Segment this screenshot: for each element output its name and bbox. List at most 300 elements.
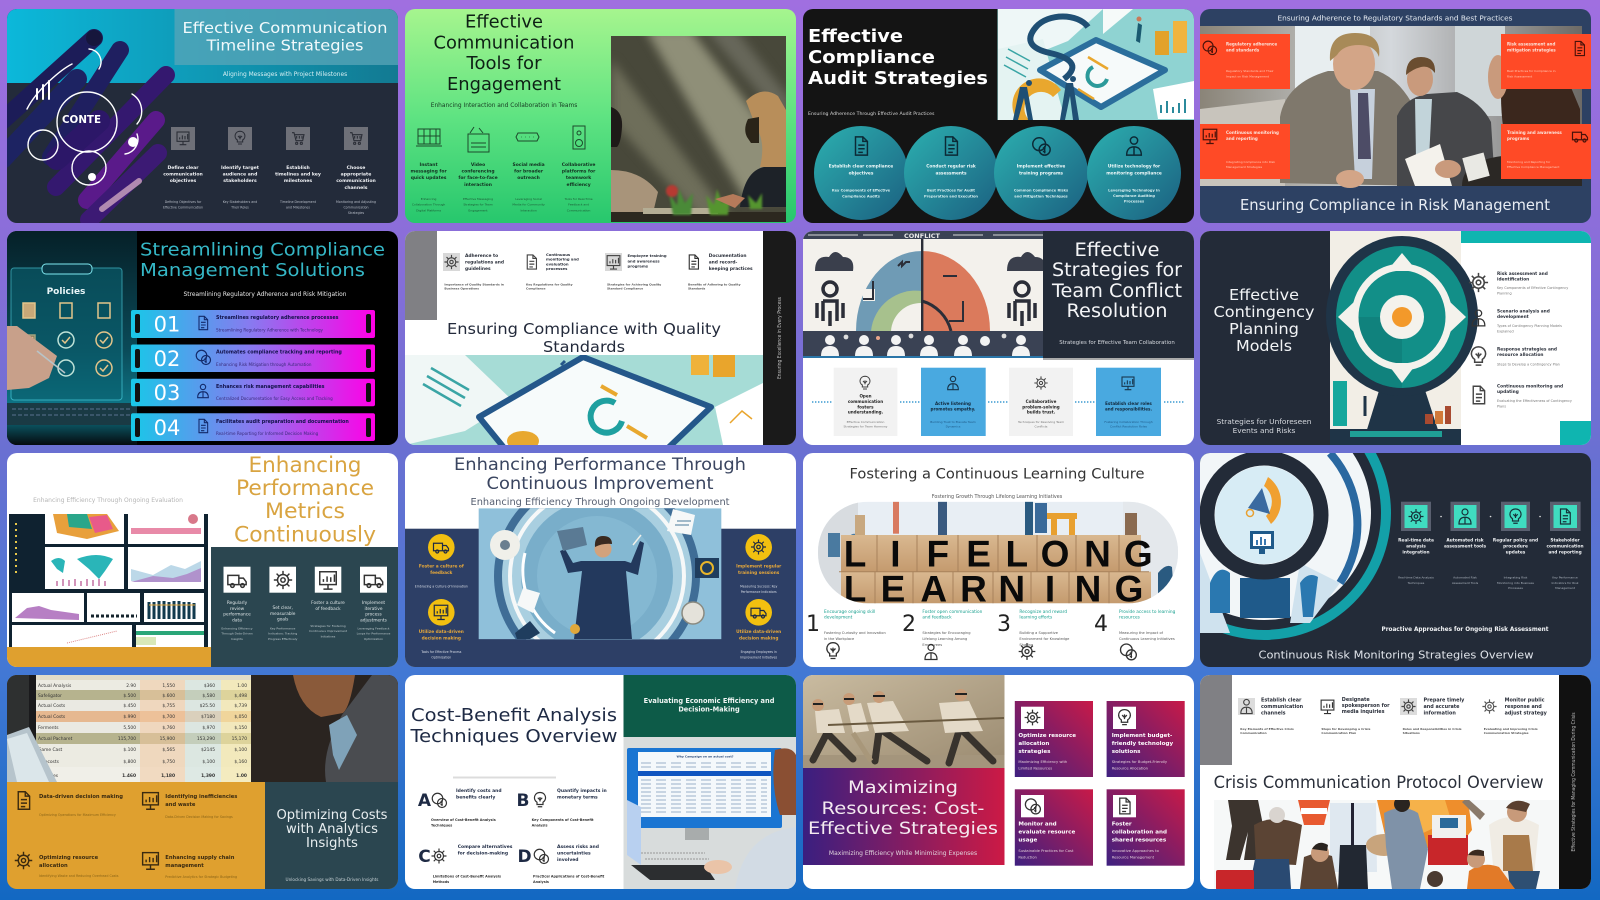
green header block: Evaluating Economic Efficiency and — [644, 697, 775, 705]
photo: cost table and analyst: 1,550 — [162, 683, 175, 689]
callout: training: Training and awareness — [1507, 130, 1562, 135]
panel: Enhancing Performance Through Continuous Improvement — [405, 453, 796, 679]
list item 03 — [131, 379, 375, 406]
step card 3: Collaborative — [1026, 399, 1057, 404]
step sublabels: Progress Effectively — [268, 637, 298, 641]
heading — [448, 322, 720, 352]
numbered steps: development — [824, 615, 853, 621]
circle cards: Key Components of Effective — [832, 188, 891, 192]
list items: Roles and Responsibilities in Crisis — [1403, 727, 1462, 731]
heading: Ensuring Compliance in Risk Management — [1240, 196, 1550, 214]
box: monitor and evaluate: Sustainable Practices for Cost — [1018, 849, 1074, 853]
step sublabels: Enhancing — [421, 197, 437, 201]
step labels: Video — [471, 162, 485, 168]
photo: cost table and analyst: $,150 — [234, 725, 247, 731]
step labels: Define clear — [167, 165, 199, 171]
photo: tug of war — [803, 675, 1004, 768]
side band: Effective Strategies for Managing Communication During Crisis — [1571, 712, 1577, 852]
step card 1: fosters — [857, 404, 874, 409]
list item 04: 04 — [154, 416, 180, 440]
step card 2: promotes empathy. — [931, 406, 976, 411]
box: foster collaboration: Foster — [1112, 822, 1132, 828]
callout: risk assessment: Best Practices for Compliance in — [1507, 69, 1556, 73]
photo: cost table and analyst: $.500 — [123, 693, 136, 699]
heading: Effective — [465, 12, 543, 32]
photo: cost table and analyst: 2.90 — [126, 683, 136, 689]
list items: Establish clear — [1261, 698, 1302, 704]
panel: Effective Communication Tools for Engagement — [405, 9, 796, 224]
photo: cost table and analyst: Relocosts — [38, 759, 60, 765]
heading box: Timeline Strategies — [205, 36, 364, 54]
step card 2: Active listening — [935, 401, 971, 406]
item D — [517, 844, 605, 884]
step labels: teamwork — [566, 175, 592, 181]
callout: regulatory adherence: Regulatory adherence — [1226, 42, 1277, 46]
item B: Key Components of Cost-Benefit — [532, 818, 594, 822]
illustration: man at dial — [479, 473, 721, 679]
step labels: assessment tools — [1444, 544, 1486, 550]
step labels: Collaborative — [562, 162, 595, 168]
photo: cost table and analyst: 1,390 — [201, 773, 215, 779]
photo: lifelong learning blocks: R — [960, 569, 987, 610]
step sublabels: Real-time Data Analysis — [1398, 576, 1434, 580]
callout: training: programs — [1507, 136, 1530, 141]
list items: Communication — [1240, 731, 1267, 735]
list item 02 — [131, 344, 375, 372]
item B: Quantify impacts in — [557, 788, 607, 794]
list items: Types of Contingency Planning Models — [1496, 324, 1562, 328]
step labels: communication — [1546, 544, 1584, 550]
photo: cost table and analyst: Actual Analysis — [38, 683, 72, 689]
item C: Methods — [433, 880, 449, 884]
step labels: Choose — [347, 165, 365, 171]
step sublabels: Key Performance — [1552, 576, 1578, 580]
step card 4: Conflict Resolution Roles — [1110, 424, 1147, 428]
step sublabels: Strategies for Fostering — [310, 624, 346, 628]
heading — [234, 453, 376, 546]
list items: identification — [1497, 277, 1529, 283]
step sublabels: Initiatives — [321, 634, 336, 638]
numbered steps: 1 — [806, 612, 820, 637]
step sublabels: Optimization — [364, 637, 383, 641]
left callouts: Utilize data-driven — [419, 629, 464, 635]
photo: cost table and analyst: $360 — [204, 683, 215, 689]
heading block — [1043, 231, 1194, 360]
list item 02: Automates compliance tracking and reporting — [216, 350, 342, 356]
photo: lifelong learning blocks: F — [926, 534, 949, 575]
box: budget-friendly technology: Implement budget- — [1112, 733, 1173, 739]
photo: lifelong learning blocks: L — [1005, 534, 1028, 575]
heading: Cost-Benefit Analysis — [411, 705, 617, 726]
subtitle: Aligning Messages with Project Milestones — [223, 72, 347, 78]
subtitle: Enhancing Interaction and Collaboration in Teams — [431, 103, 577, 109]
callout: training: Effective Compliance Management — [1507, 165, 1560, 169]
photo: lifelong learning blocks — [818, 502, 1178, 610]
icon boxes — [1401, 502, 1581, 531]
list items: Importance of Quality Standards in — [444, 282, 504, 286]
step labels: Foster a culture — [311, 600, 345, 606]
numbered steps: in the Workplace — [824, 637, 855, 641]
item A: Identify costs and — [456, 788, 502, 794]
circle cards: monitoring compliance — [1106, 170, 1162, 176]
item C: Limitations of Cost-Benefit Analysis — [433, 874, 501, 878]
heading block: Maximizing — [848, 778, 958, 798]
step sublabels: Techniques — [1407, 581, 1425, 585]
step sublabels: Enhancing Efficiency — [221, 626, 253, 630]
item D: uncertainties — [557, 851, 591, 857]
panel: Cost-Benefit Analysis Techniques Overview — [405, 675, 796, 889]
callout: regulatory adherence: Regulatory Standards and Their — [1226, 69, 1274, 73]
numbered steps: 2 — [902, 612, 916, 637]
heading block: Resources: Cost- — [822, 799, 984, 819]
heading: Optimizing Costs — [276, 808, 388, 823]
list items: Employee training — [628, 253, 667, 258]
box: budget-friendly technology: Resource Allocation — [1112, 767, 1149, 771]
step labels: Regular policy and — [1493, 538, 1538, 544]
photo: cost table and analyst: $,760 — [162, 725, 175, 731]
step labels: Implement — [362, 600, 385, 606]
item D: Analysis — [533, 880, 549, 884]
list items: Response strategies and — [1497, 346, 1557, 352]
list items: response and — [1505, 704, 1542, 710]
box: budget-friendly technology — [1107, 701, 1185, 777]
list items: programs — [628, 264, 649, 269]
right callouts: Improvement Initiatives — [740, 656, 778, 660]
box: optimize resource allocation: allocation — [1018, 741, 1049, 747]
step labels — [223, 600, 388, 623]
heading: Continuous Improvement — [486, 474, 714, 494]
item D: Practical Applications of Cost-Benefit — [533, 874, 605, 878]
box: monitor and evaluate — [1015, 789, 1093, 866]
list items — [443, 252, 753, 290]
photo: cost table and analyst: Game Cast — [38, 747, 63, 753]
circle cards: Leveraging Technology in — [1108, 188, 1160, 192]
list items: Monitor public — [1505, 698, 1545, 704]
list items: Key Regulations for Quality — [526, 282, 573, 286]
step card 4: Establish clear roles — [1105, 401, 1152, 406]
step sublabels: Continuous Improvement — [309, 629, 348, 633]
circle cards: Implement effective — [1017, 164, 1065, 170]
step sublabels: Defining Objectives for — [165, 200, 202, 204]
step labels: review — [230, 606, 245, 612]
callout: risk assessment: Risk assessment and — [1507, 42, 1555, 46]
photo: lifelong learning blocks: G — [1124, 534, 1153, 575]
list items: development — [1497, 314, 1529, 320]
list items: updating — [1497, 389, 1519, 395]
step sublabels: Leveraging Feedback — [358, 626, 390, 630]
list items: and waste — [165, 802, 196, 808]
subtitle: Proactive Approaches for Ongoing Risk Assessment — [1382, 626, 1549, 633]
heading — [409, 705, 618, 747]
photo: cost table and analyst: 15,170 — [232, 736, 247, 742]
item A: benefits clearly — [456, 795, 495, 801]
photo: cost table and analyst: $,739 — [234, 703, 247, 709]
panel: Enhancing Performance Metrics Continuously — [7, 453, 398, 667]
list items: channels — [1261, 710, 1286, 716]
decorative icon cluster — [2, 38, 166, 220]
left callouts: Tools for Effective Process — [420, 650, 462, 654]
list items: monitoring and — [546, 257, 579, 262]
numbered steps: Continuous Learning Initiatives — [1119, 637, 1175, 641]
numbered steps: Encourage ongoing skill — [824, 609, 875, 615]
step sublabels — [1398, 576, 1579, 590]
heading: Engagement — [447, 74, 561, 95]
item A: Overview of Cost-Benefit Analysis — [431, 818, 496, 822]
photo: cost table and analyst: 115,700 — [118, 736, 136, 742]
callout: regulatory adherence: Impact on Risk Management — [1226, 74, 1270, 78]
photo: cost table and analyst: $,100 — [202, 759, 215, 765]
list items: Business Operations — [444, 286, 479, 290]
step labels: for broader — [514, 169, 544, 175]
photo: lifelong learning blocks: A — [920, 569, 947, 610]
callout: continuous monitoring — [1200, 124, 1290, 179]
list items: Continuous monitoring and — [1497, 384, 1563, 390]
numbered steps: Building a Supportive — [1019, 631, 1059, 635]
list items: Data-driven decision making — [39, 794, 123, 800]
step labels: stakeholders — [223, 178, 257, 184]
illustration: conflict head: CONFLICT — [904, 232, 941, 240]
item A: A — [418, 791, 432, 811]
list items: Documentation — [709, 253, 747, 259]
photo: cost table and analyst: $,970 — [202, 725, 215, 731]
callout: risk assessment: mitigation strategies — [1507, 48, 1556, 52]
list items: communication — [1261, 704, 1304, 710]
step labels: goals — [277, 617, 289, 623]
photo: cost table and analyst: $,100 — [234, 747, 247, 753]
list items — [1238, 697, 1548, 735]
step sublabels: Through Data-Driven — [220, 632, 253, 636]
photo: cost table and analyst: Ferments — [38, 725, 59, 731]
list item 01: Streamlining Regulatory Adherence with Technology — [216, 328, 324, 332]
subtitle: Streamlining Regulatory Adherence and Risk Mitigation — [184, 292, 347, 298]
left callouts: decision making — [422, 636, 461, 642]
photo: lifelong learning blocks: G — [1115, 569, 1143, 610]
heading: Insights — [306, 836, 358, 851]
photo: cost table and analyst: 153,290 — [197, 736, 215, 742]
step labels: audience and — [223, 172, 257, 178]
list items: management — [165, 863, 204, 869]
panel: Effective Strategies for Team Conflict Resolution — [803, 231, 1194, 445]
circle cards: Processes — [1124, 200, 1144, 204]
step sublabels — [220, 624, 391, 641]
photo: cost table and analyst: $,700 — [162, 714, 175, 720]
item B: Analysis — [532, 823, 548, 827]
list items: Explained — [1497, 330, 1514, 334]
numbered steps: and feedback — [922, 615, 952, 621]
step labels: Identify target — [221, 165, 260, 171]
left callouts: feedback — [430, 570, 453, 576]
step labels: procedure — [1503, 544, 1528, 550]
panel: Fostering a Continuous Learning Culture — [803, 453, 1194, 667]
list items: Data-Driven Decision Making for Savings — [165, 815, 233, 819]
list items: Communication Strategies — [1484, 731, 1529, 735]
circle cards: Common Compliance Risks — [1014, 188, 1068, 192]
illustration: crisis scene — [1214, 796, 1559, 890]
step card 1: Effective Communication — [847, 420, 884, 424]
callout: training: Monitoring and Reporting for — [1507, 160, 1551, 164]
heading: Enhancing Performance Through — [454, 455, 746, 475]
box: optimize resource allocation: Optimize resource — [1018, 733, 1076, 739]
numbered steps: resources — [1119, 615, 1141, 621]
list items: Compliance — [526, 286, 546, 290]
numbered steps: Fostering Curiosity and Innovation — [824, 631, 886, 635]
item C: Compare alternatives — [458, 844, 513, 850]
step labels: integration — [1402, 550, 1430, 556]
heading — [434, 12, 574, 95]
box: budget-friendly technology: friendly technology — [1112, 741, 1173, 747]
step sublabels: Strategies — [348, 211, 364, 215]
step labels: outreach — [517, 175, 540, 181]
circle cards: Preparation and Execution — [924, 194, 978, 198]
left callouts: Foster a culture of — [419, 564, 464, 570]
list items: Designate — [1342, 697, 1370, 703]
step sublabels: Strategies for Team — [463, 203, 493, 207]
list items: and accurate — [1424, 704, 1460, 710]
step sublabels: Indicators: Tracking — [268, 632, 297, 636]
list items: Plans — [1497, 405, 1506, 409]
panel: Effective Communication Timeline Strategies — [2, 9, 398, 223]
photo: cost table and analyst: $.990 — [123, 714, 136, 720]
step sublabels: Engagement — [468, 208, 488, 212]
step labels — [411, 162, 596, 188]
photo: business meeting — [1200, 26, 1582, 188]
photo: cost table and analyst: $.600 — [162, 693, 175, 699]
step card 2 — [921, 368, 986, 436]
step labels: messaging for — [411, 169, 447, 175]
step sublabels: Digital Platforms — [416, 208, 441, 212]
icons row — [224, 567, 387, 593]
circle cards: training programs — [1019, 170, 1063, 176]
photo: lifelong learning blocks: N — [1075, 569, 1101, 610]
list item 03: Enhances risk management capabilities — [216, 384, 325, 390]
box: foster collaboration — [1107, 789, 1185, 866]
box: monitor and evaluate: Monitor and — [1018, 822, 1057, 828]
right callouts: decision making — [739, 636, 778, 642]
circle cards: Establish clear compliance — [829, 164, 893, 170]
step card 2: Building Trust to Elevate Team — [930, 420, 976, 424]
step card 1: understanding. — [848, 410, 884, 415]
step sublabels: Collaboration Through — [412, 203, 445, 207]
list item 03: 03 — [154, 381, 180, 405]
side band: Ensuring Excellence in Every Process — [777, 297, 783, 379]
list items: Optimizing resource — [39, 855, 99, 861]
list item 02: 02 — [154, 347, 180, 371]
box: monitor and evaluate: usage — [1018, 838, 1037, 844]
list items: information — [1424, 710, 1456, 716]
subtitle: Enhancing Efficiency Through Ongoing Evaluation — [33, 497, 183, 504]
circle cards: objectives — [849, 170, 874, 176]
illustration: audit documents — [998, 9, 1194, 120]
photo: cost table and analyst: 1.460 — [122, 773, 136, 779]
step labels: Set clear, — [273, 605, 293, 611]
step labels: channels — [344, 185, 368, 191]
panel: Ensuring Compliance in Risk Management — [1200, 9, 1591, 223]
numbered steps — [806, 609, 1176, 660]
numbered steps: learning efforts — [1019, 615, 1053, 621]
list items: Communication Plan — [1321, 731, 1356, 735]
item D: Assess risks and — [557, 844, 599, 850]
step labels: measurable — [270, 611, 296, 617]
list items: spokesperson for — [1342, 703, 1390, 709]
callout: continuous monitoring: Continuous monitoring — [1226, 130, 1279, 135]
photo: lifelong learning blocks: N — [998, 569, 1025, 610]
step sublabels: Key Performance — [270, 626, 296, 630]
list items: and record- — [709, 259, 738, 265]
step sublabels: Feedback and — [568, 203, 589, 207]
heading: Metrics — [265, 499, 345, 523]
step labels: communication — [336, 178, 376, 184]
list items: Planning — [1497, 292, 1512, 296]
step sublabels: Tools for Real-Time — [564, 197, 593, 201]
step labels: timelines and key — [275, 172, 321, 178]
step labels: platforms for — [562, 169, 596, 175]
callout: continuous monitoring: Management Strategies — [1226, 165, 1262, 169]
callout: regulatory adherence — [1200, 34, 1290, 89]
photo: cost table and analyst: $,750 — [162, 759, 175, 765]
photo: analyst at monitor — [624, 737, 796, 889]
heading block: Effective Strategies — [808, 819, 998, 839]
step sublabels: Communication — [567, 208, 591, 212]
icons row — [416, 126, 585, 152]
photo: cost table and analyst: $,580 — [202, 693, 215, 699]
step labels: milestones — [284, 178, 312, 184]
box: optimize resource allocation — [1015, 701, 1093, 777]
box: budget-friendly technology: solutions — [1112, 749, 1141, 755]
item C: C — [418, 847, 431, 867]
list items: Benefits of Adhering to Quality — [688, 282, 741, 286]
photo: lifelong learning blocks: E — [966, 534, 991, 575]
photo: cost table and analyst: $7180 — [201, 714, 215, 720]
step card 1 — [834, 368, 897, 436]
box: optimize resource allocation: strategies — [1018, 749, 1051, 755]
box: budget-friendly technology: Strategies for Budget-Friendly — [1112, 760, 1168, 764]
circle cards: Best Practices for Audit — [927, 188, 975, 192]
list items: Risk assessment and — [1497, 271, 1548, 277]
step card 2: Dynamics — [946, 424, 961, 428]
item A: Techniques — [431, 823, 452, 827]
list items: guidelines — [465, 266, 491, 272]
illustration: conflict head — [803, 231, 1045, 358]
box: foster collaboration: Innovative Approaches to — [1112, 849, 1160, 853]
step card 3: Conflicts — [1035, 424, 1048, 428]
list items: Evaluating and Improving Crisis — [1484, 727, 1538, 731]
photo: cost table and analyst: Variables — [38, 773, 59, 779]
heading block: Team Conflict — [1051, 281, 1182, 302]
callout: risk assessment — [1501, 34, 1591, 89]
heading: Audit Strategies — [808, 68, 988, 89]
panel: Continuous Risk Monitoring Strategies Overview — [1137, 386, 1591, 667]
image: policies clipboard — [7, 231, 137, 445]
circle cards: Conduct regular risk — [926, 164, 976, 170]
photo: lifelong learning blocks: I — [890, 534, 901, 575]
photo: cost table and analyst — [7, 675, 398, 782]
panel: Maximizing Resources: Cost-Effective Strategies — [803, 675, 1194, 889]
photo: cost table and analyst: Safeligator — [38, 693, 62, 699]
photo: lifelong learning blocks: E — [881, 569, 905, 610]
list items: Prepare timely — [1424, 698, 1465, 704]
step card 4: Fostering Collaboration Through — [1104, 420, 1153, 424]
step sublabels: Media for Community — [512, 203, 545, 207]
step sublabels: Leveraging Social — [515, 197, 542, 201]
list item 01: Streamlines regulatory adherence processes — [216, 315, 339, 321]
heading: Fostering a Continuous Learning Culture — [850, 466, 1144, 482]
item B: monetary terms — [557, 795, 598, 801]
step labels: conferencing — [461, 169, 495, 175]
step sublabels: Loops for Performance — [357, 632, 391, 636]
step labels: quick updates — [411, 175, 447, 181]
heading: Crisis Communication Protocol Overview — [1214, 773, 1544, 793]
step sublabels: Interaction — [520, 208, 537, 212]
